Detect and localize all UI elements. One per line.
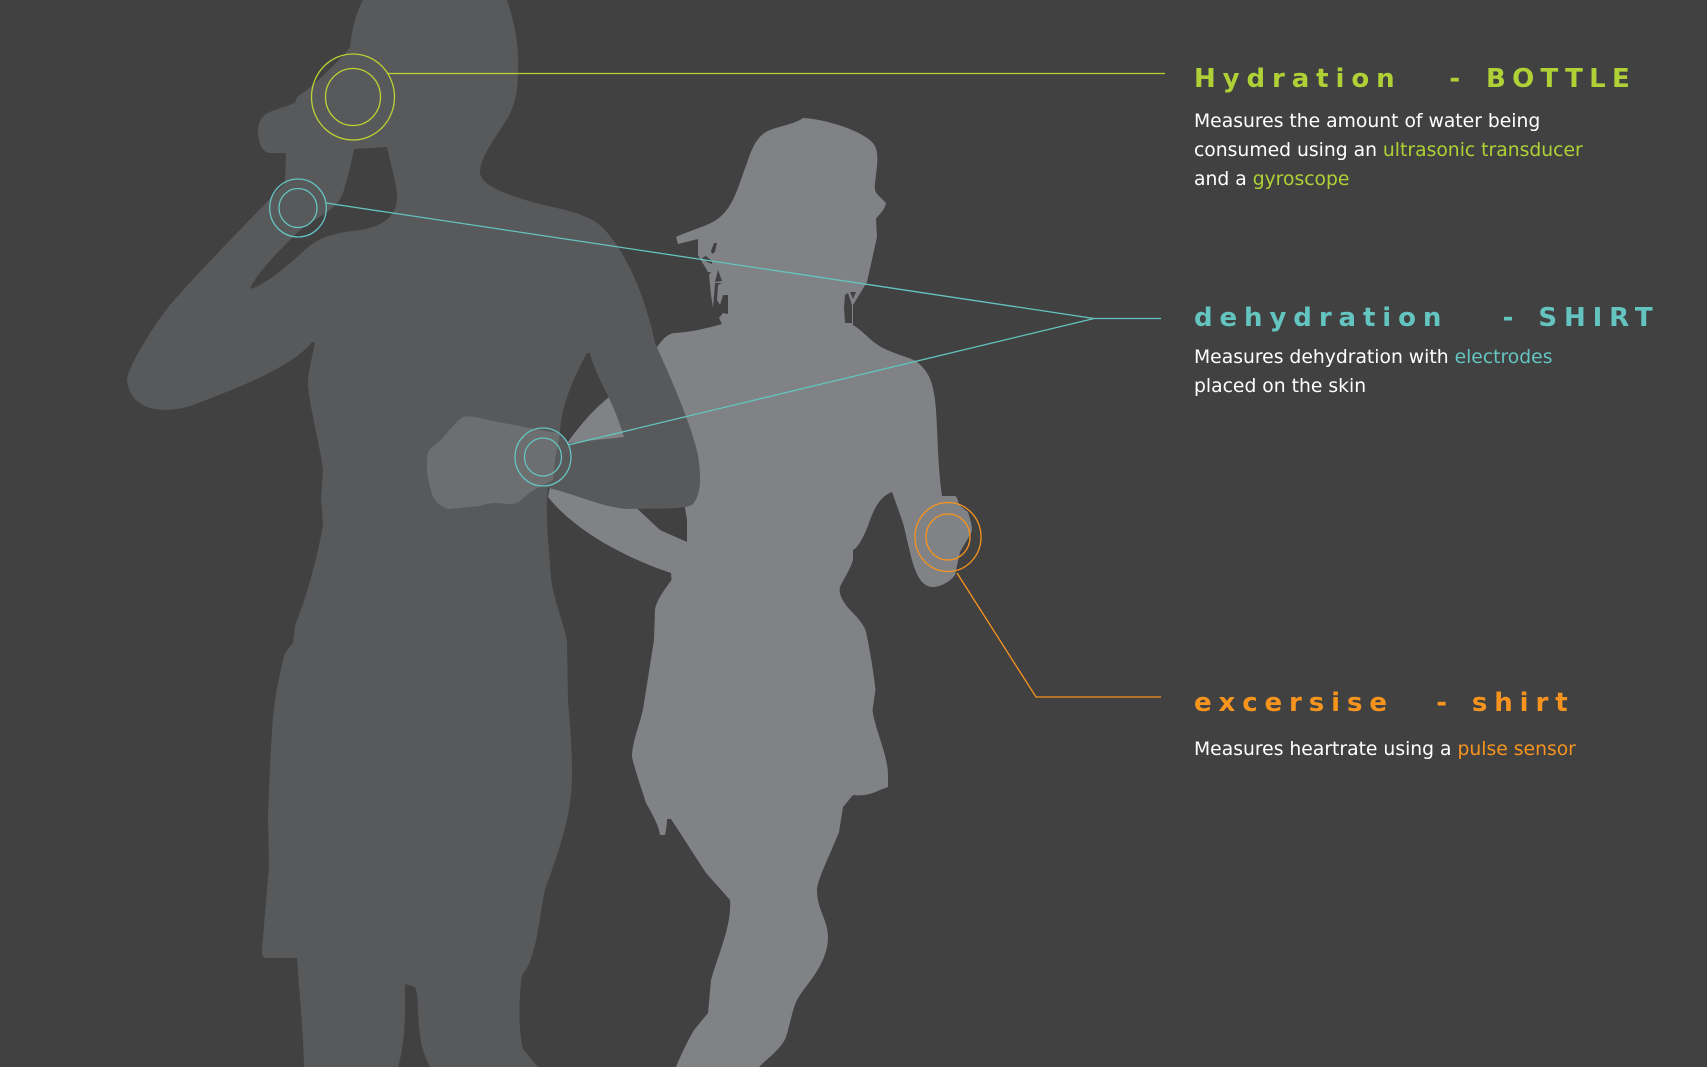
- heading: hydration bottle: Hydration -: [1194, 64, 1467, 94]
- silhouette: back figure: [127, 0, 700, 1067]
- heading: hydration bottle: BOTTLE: [1486, 64, 1636, 94]
- text: exercise description: Measures heartrate using a pulse sensor: [1194, 739, 1576, 760]
- heading: exercise shirt: excersise: [1194, 688, 1394, 718]
- silhouette: front figure: [548, 118, 972, 1067]
- text: dehydration description: Measures dehydration with electrodes placed on the skin: [1194, 347, 1552, 397]
- callout: shirt electrodes teal: [270, 179, 1161, 486]
- heading: exercise shirt: shirt: [1472, 688, 1575, 718]
- silhouette: lighter fist over torso: [427, 416, 560, 509]
- heading: dehydration shirt: -: [1503, 303, 1520, 333]
- text: hydration description: Measures the amount of water being consumed using an ultrasonic transducer and a gyroscope: [1194, 111, 1583, 190]
- heading: dehydration shirt: SHIRT: [1538, 303, 1660, 333]
- callout: pulse sensor orange: [915, 502, 1161, 697]
- heading: hydration bottle: [1194, 64, 1636, 94]
- heading: dehydration shirt: [1194, 303, 1660, 333]
- heading: exercise shirt: -: [1436, 688, 1454, 718]
- heading: dehydration shirt: dehydration: [1194, 303, 1448, 333]
- callout: bottle sensor yellow-green: [312, 54, 1165, 140]
- heading: exercise shirt: [1194, 688, 1575, 718]
